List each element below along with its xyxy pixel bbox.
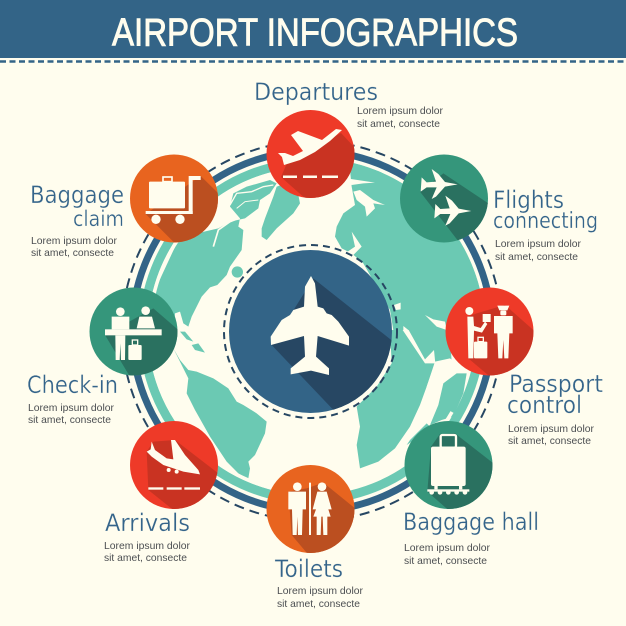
north america — [150, 180, 300, 337]
label: passport control: Lorem ipsum dolor — [508, 423, 594, 435]
label: check-in: Check-in — [27, 371, 118, 399]
badge: toilets — [266, 465, 355, 557]
label: baggage hall: sit amet, consecte — [404, 555, 487, 567]
label: toilets: sit amet, consecte — [277, 598, 360, 610]
label: baggage hall — [403, 508, 539, 567]
label: flights connecting: sit amet, consecte — [495, 251, 578, 263]
label: arrivals: sit amet, consecte — [104, 552, 187, 564]
icon: departing plane — [278, 129, 342, 178]
badge: departures — [266, 110, 357, 205]
label: baggage claim — [30, 181, 124, 259]
badge: baggage claim — [130, 154, 218, 243]
label: arrivals: Arrivals — [105, 509, 190, 537]
label: flights connecting: Flights — [493, 186, 564, 214]
label: arrivals — [104, 509, 190, 564]
badge: flights connecting — [400, 154, 488, 243]
icon: suitcase on belt — [427, 435, 469, 495]
label: baggage claim: sit amet, consecte — [31, 247, 114, 259]
label: baggage hall: Lorem ipsum dolor — [404, 542, 490, 554]
label: baggage hall: Baggage hall — [403, 508, 539, 536]
badge: check-in — [90, 288, 178, 377]
label: flights connecting: Lorem ipsum dolor — [495, 238, 581, 250]
icon: traveller and officer — [465, 306, 513, 358]
header band — [0, 0, 626, 62]
title: AIRPORT INFOGRAPHICS — [112, 12, 518, 54]
badge: arrivals — [130, 421, 218, 510]
eurasia — [335, 163, 480, 330]
label: flights connecting — [493, 186, 598, 263]
caribbean and south america — [173, 332, 267, 478]
icon: two planes — [421, 169, 471, 226]
label: baggage claim: claim — [73, 207, 124, 231]
africa and arabia — [357, 330, 467, 468]
label: check-in: sit amet, consecte — [28, 414, 111, 426]
label: arrivals: Lorem ipsum dolor — [104, 540, 190, 552]
badge: passport control — [446, 288, 534, 377]
globe with rings — [122, 141, 502, 521]
icon: landing plane — [147, 440, 200, 490]
central plane badge — [224, 245, 397, 418]
icon: plane — [271, 276, 349, 375]
icon: luggage cart — [146, 176, 201, 224]
label: passport control: Passport — [509, 370, 603, 398]
label: departures: sit amet, consecte — [357, 118, 440, 130]
label: baggage claim: Lorem ipsum dolor — [31, 235, 117, 247]
label: departures — [254, 78, 443, 130]
badge: baggage hall — [404, 421, 493, 510]
label: departures: Departures — [254, 78, 378, 106]
icon: check-in desk — [105, 306, 162, 360]
label: toilets: Toilets — [274, 555, 343, 583]
label: baggage claim: Baggage — [30, 181, 124, 209]
label: passport control: control — [507, 391, 582, 419]
label: departures: Lorem ipsum dolor — [357, 105, 443, 117]
label: check-in: Lorem ipsum dolor — [28, 402, 114, 414]
label: passport control — [507, 370, 603, 447]
label: passport control: sit amet, consecte — [508, 435, 591, 447]
label: toilets: Lorem ipsum dolor — [277, 585, 363, 597]
label: toilets — [274, 555, 363, 610]
label: check-in — [27, 371, 118, 426]
icon: man and woman — [288, 482, 332, 535]
label: flights connecting: connecting — [493, 209, 598, 234]
